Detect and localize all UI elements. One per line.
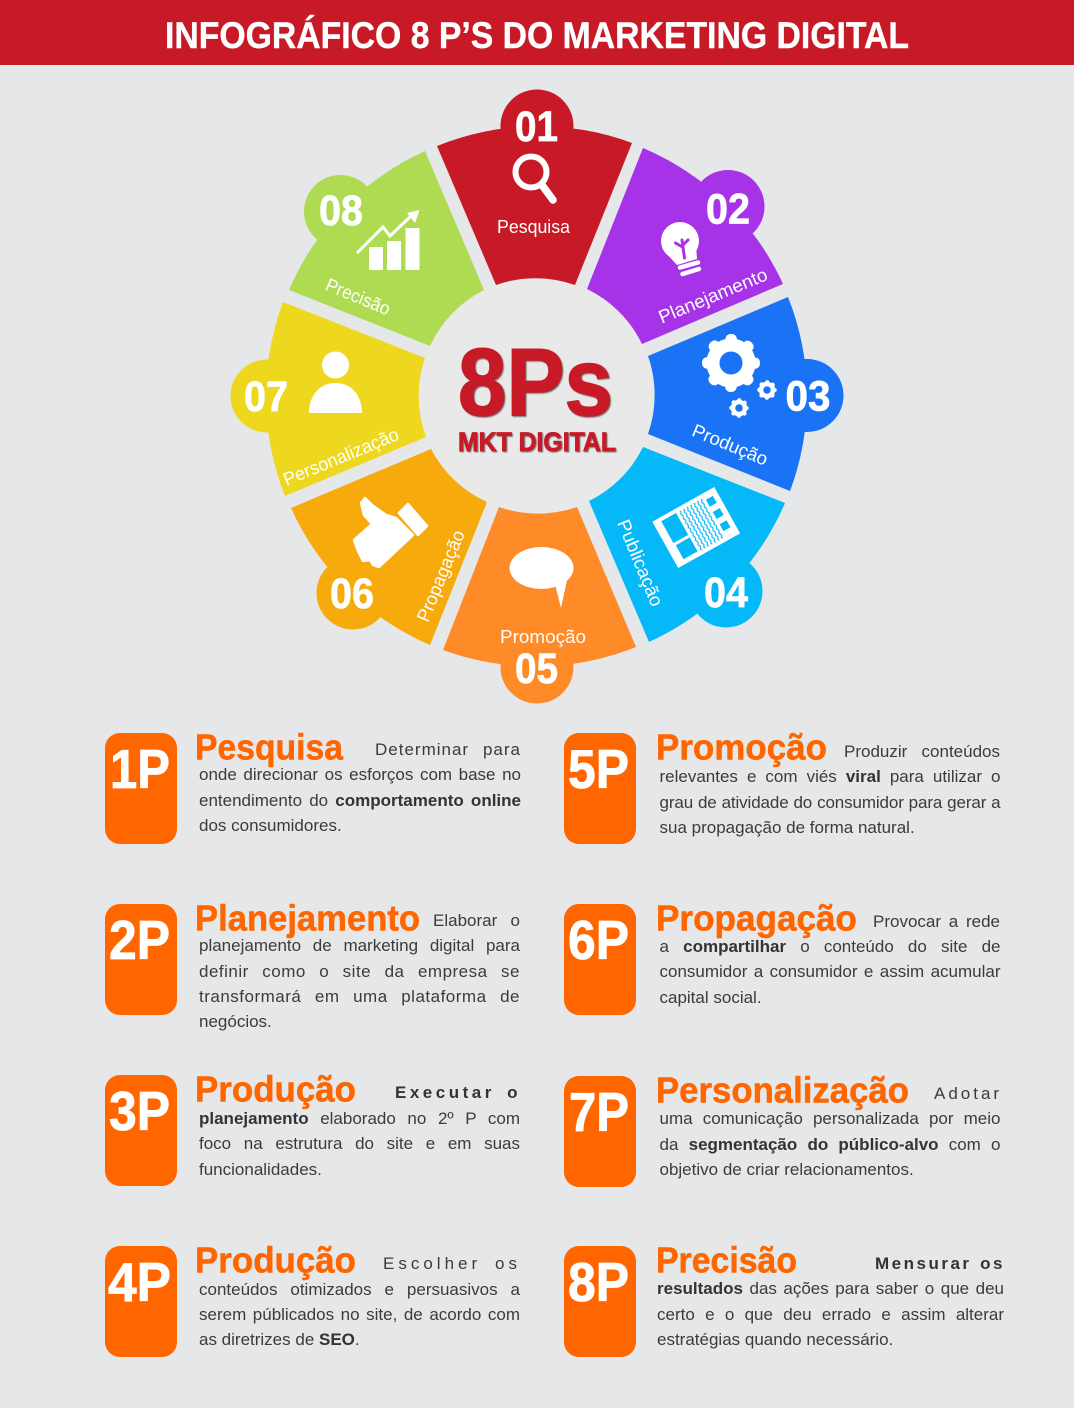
text block: Adotar bbox=[934, 1084, 1002, 1102]
text block: grau de atividade do consumidor para gerar a bbox=[660, 793, 1000, 812]
heading Planejamento: Planejamento bbox=[195, 898, 420, 938]
segment 05 Promocao: 05 bbox=[515, 645, 558, 693]
text block: Produzir conteúdos bbox=[844, 742, 1000, 761]
segment 06 Propagacao: 06 bbox=[330, 570, 374, 618]
text block: consumidor a consumidor e assim acumular bbox=[660, 962, 1000, 981]
text block: transformará em uma plataforma de bbox=[199, 987, 520, 1006]
segment 05 Promocao: Promoção bbox=[500, 626, 586, 647]
badge 1P: 1P bbox=[110, 738, 170, 800]
text block: Elaborar o bbox=[433, 911, 520, 930]
badge 6P bbox=[564, 904, 636, 1015]
text block: definir como o site da empresa se bbox=[199, 962, 520, 981]
text block: as diretrizes de SEO. bbox=[199, 1330, 360, 1348]
center hub bbox=[419, 278, 655, 514]
text block: relevantes e com viés viral para utilizar o bbox=[660, 767, 1000, 786]
title banner bbox=[0, 0, 1074, 65]
segment 01 Pesquisa: Pesquisa bbox=[497, 217, 571, 237]
heading Pesquisa: Pesquisa bbox=[195, 726, 344, 768]
segment 08 Precisao: Precisão bbox=[323, 274, 394, 319]
badge 2P bbox=[105, 904, 177, 1015]
text block bbox=[199, 740, 521, 835]
panel: 7P Personalizacao bbox=[564, 1069, 1002, 1187]
text block: Escolher os bbox=[383, 1254, 521, 1272]
segment 04 Publicacao: Publicação bbox=[613, 516, 668, 609]
segment 08 Precisao: 08 bbox=[319, 187, 363, 235]
text block: conteúdos otimizados e persuasivos a bbox=[199, 1280, 520, 1298]
text block: objetivo de criar relacionamentos. bbox=[660, 1160, 914, 1178]
segment 03 Producao: 03 bbox=[786, 372, 830, 420]
text block: da segmentação do público-alvo com o bbox=[660, 1134, 1000, 1154]
panel: 2P Planejamento bbox=[105, 898, 520, 1031]
text block: onde direcionar os esforços com base no bbox=[199, 765, 521, 784]
segment 07 Personalizacao bbox=[230, 302, 426, 496]
wheel diagram bbox=[230, 90, 844, 704]
badge 5P: 5P bbox=[568, 738, 629, 800]
icon: gears bbox=[707, 339, 775, 416]
badge 4P: 4P bbox=[108, 1250, 171, 1312]
badge 7P: 7P bbox=[569, 1080, 629, 1142]
segment 02 Planejamento: Planejamento bbox=[655, 264, 770, 327]
heading Promocao: Promoção bbox=[656, 726, 827, 768]
segment 06 Propagacao bbox=[291, 449, 487, 645]
text block: planejamento de marketing digital para bbox=[199, 936, 520, 955]
text block bbox=[660, 742, 1001, 837]
heading Propagacao: Propagação bbox=[656, 898, 857, 938]
text block: Mensurar os bbox=[875, 1254, 1005, 1273]
text block bbox=[199, 911, 520, 1031]
text block: estratégias quando necessário. bbox=[657, 1330, 893, 1349]
badge 5P bbox=[564, 733, 636, 844]
icon: magnifier bbox=[516, 156, 553, 200]
heading Personalizacao: Personalização bbox=[656, 1069, 909, 1110]
segment 03 Producao: Produção bbox=[689, 420, 771, 470]
text block bbox=[657, 1254, 1005, 1349]
text block: Determinar para bbox=[375, 740, 521, 759]
panel: 8P Precisao bbox=[564, 1240, 1005, 1357]
panel: 4P Producao bbox=[105, 1239, 521, 1357]
segment 06 Propagacao: Propagação bbox=[412, 527, 469, 625]
badge 8P: 8P bbox=[568, 1251, 629, 1313]
segment 01 Pesquisa: 01 bbox=[515, 103, 558, 151]
badge 3P bbox=[105, 1075, 177, 1186]
text block: Executar o bbox=[395, 1083, 521, 1102]
segment 01 Pesquisa bbox=[437, 90, 632, 285]
text block: resultados das ações para saber o que deu bbox=[657, 1279, 1004, 1298]
badge 6P: 6P bbox=[568, 909, 629, 971]
text block bbox=[660, 912, 1000, 1007]
segment 04 Publicacao: 04 bbox=[704, 569, 748, 617]
center hub: 8Ps bbox=[458, 329, 613, 436]
text block: Provocar a rede bbox=[873, 912, 1000, 931]
text block bbox=[199, 1083, 521, 1179]
icon: speech bubble bbox=[510, 547, 574, 608]
center hub: MKT DIGITAL bbox=[458, 427, 616, 457]
segment 07 Personalizacao: 07 bbox=[244, 373, 288, 421]
heading Precisao: Precisão bbox=[656, 1240, 797, 1280]
text block: entendimento do comportamento online bbox=[199, 791, 521, 810]
text block: certo e o que deu errado e assim alterar bbox=[657, 1305, 1004, 1324]
segment 02 Planejamento: 02 bbox=[706, 186, 750, 234]
segment 02 Planejamento bbox=[587, 148, 783, 344]
text block: funcionalidades. bbox=[199, 1160, 322, 1179]
text block: a compartilhar o conteúdo do site de bbox=[660, 937, 1000, 956]
badge 3P: 3P bbox=[109, 1080, 170, 1142]
icon: newspaper bbox=[652, 487, 740, 568]
title banner: INFOGRÁFICO 8 P’S DO MARKETING DIGITAL bbox=[165, 15, 909, 56]
text block: sua propagação de forma natural. bbox=[660, 818, 915, 837]
text block: dos consumidores. bbox=[199, 816, 342, 835]
text block: capital social. bbox=[660, 988, 762, 1007]
icon: person bbox=[309, 352, 362, 413]
text block bbox=[660, 1084, 1002, 1178]
segment 04 Publicacao bbox=[589, 447, 785, 642]
text block: foco na estrutura do site e em suas bbox=[199, 1134, 520, 1153]
panel: 1P Pesquisa bbox=[105, 726, 521, 844]
badge 8P bbox=[564, 1246, 636, 1357]
panel: 5P Promocao bbox=[564, 726, 1001, 844]
text block: planejamento elaborado no 2º P com bbox=[199, 1109, 520, 1128]
panel: 6P Propagacao bbox=[564, 898, 1000, 1015]
text block: uma comunicação personalizada por meio bbox=[660, 1108, 1000, 1128]
segment 07 Personalizacao: Personalização bbox=[280, 423, 402, 490]
badge 7P bbox=[564, 1076, 636, 1186]
badge 4P bbox=[105, 1246, 177, 1356]
segment 03 Producao bbox=[648, 297, 844, 491]
icon: thumbs up bbox=[354, 498, 427, 567]
panel: 3P Producao bbox=[105, 1068, 521, 1186]
heading Producao: Produção bbox=[195, 1239, 356, 1280]
segment 08 Precisao bbox=[289, 151, 484, 346]
icon: rising chart bbox=[357, 210, 420, 270]
text block: serem públicados no site, de acordo com bbox=[199, 1304, 520, 1324]
segment 05 Promocao bbox=[443, 507, 636, 704]
badge 2P: 2P bbox=[109, 909, 170, 971]
badge 1P bbox=[105, 733, 177, 844]
text block bbox=[199, 1254, 521, 1348]
icon: light bulb bbox=[661, 222, 699, 274]
heading Producao: Produção bbox=[195, 1068, 356, 1110]
text block: negócios. bbox=[199, 1012, 272, 1031]
